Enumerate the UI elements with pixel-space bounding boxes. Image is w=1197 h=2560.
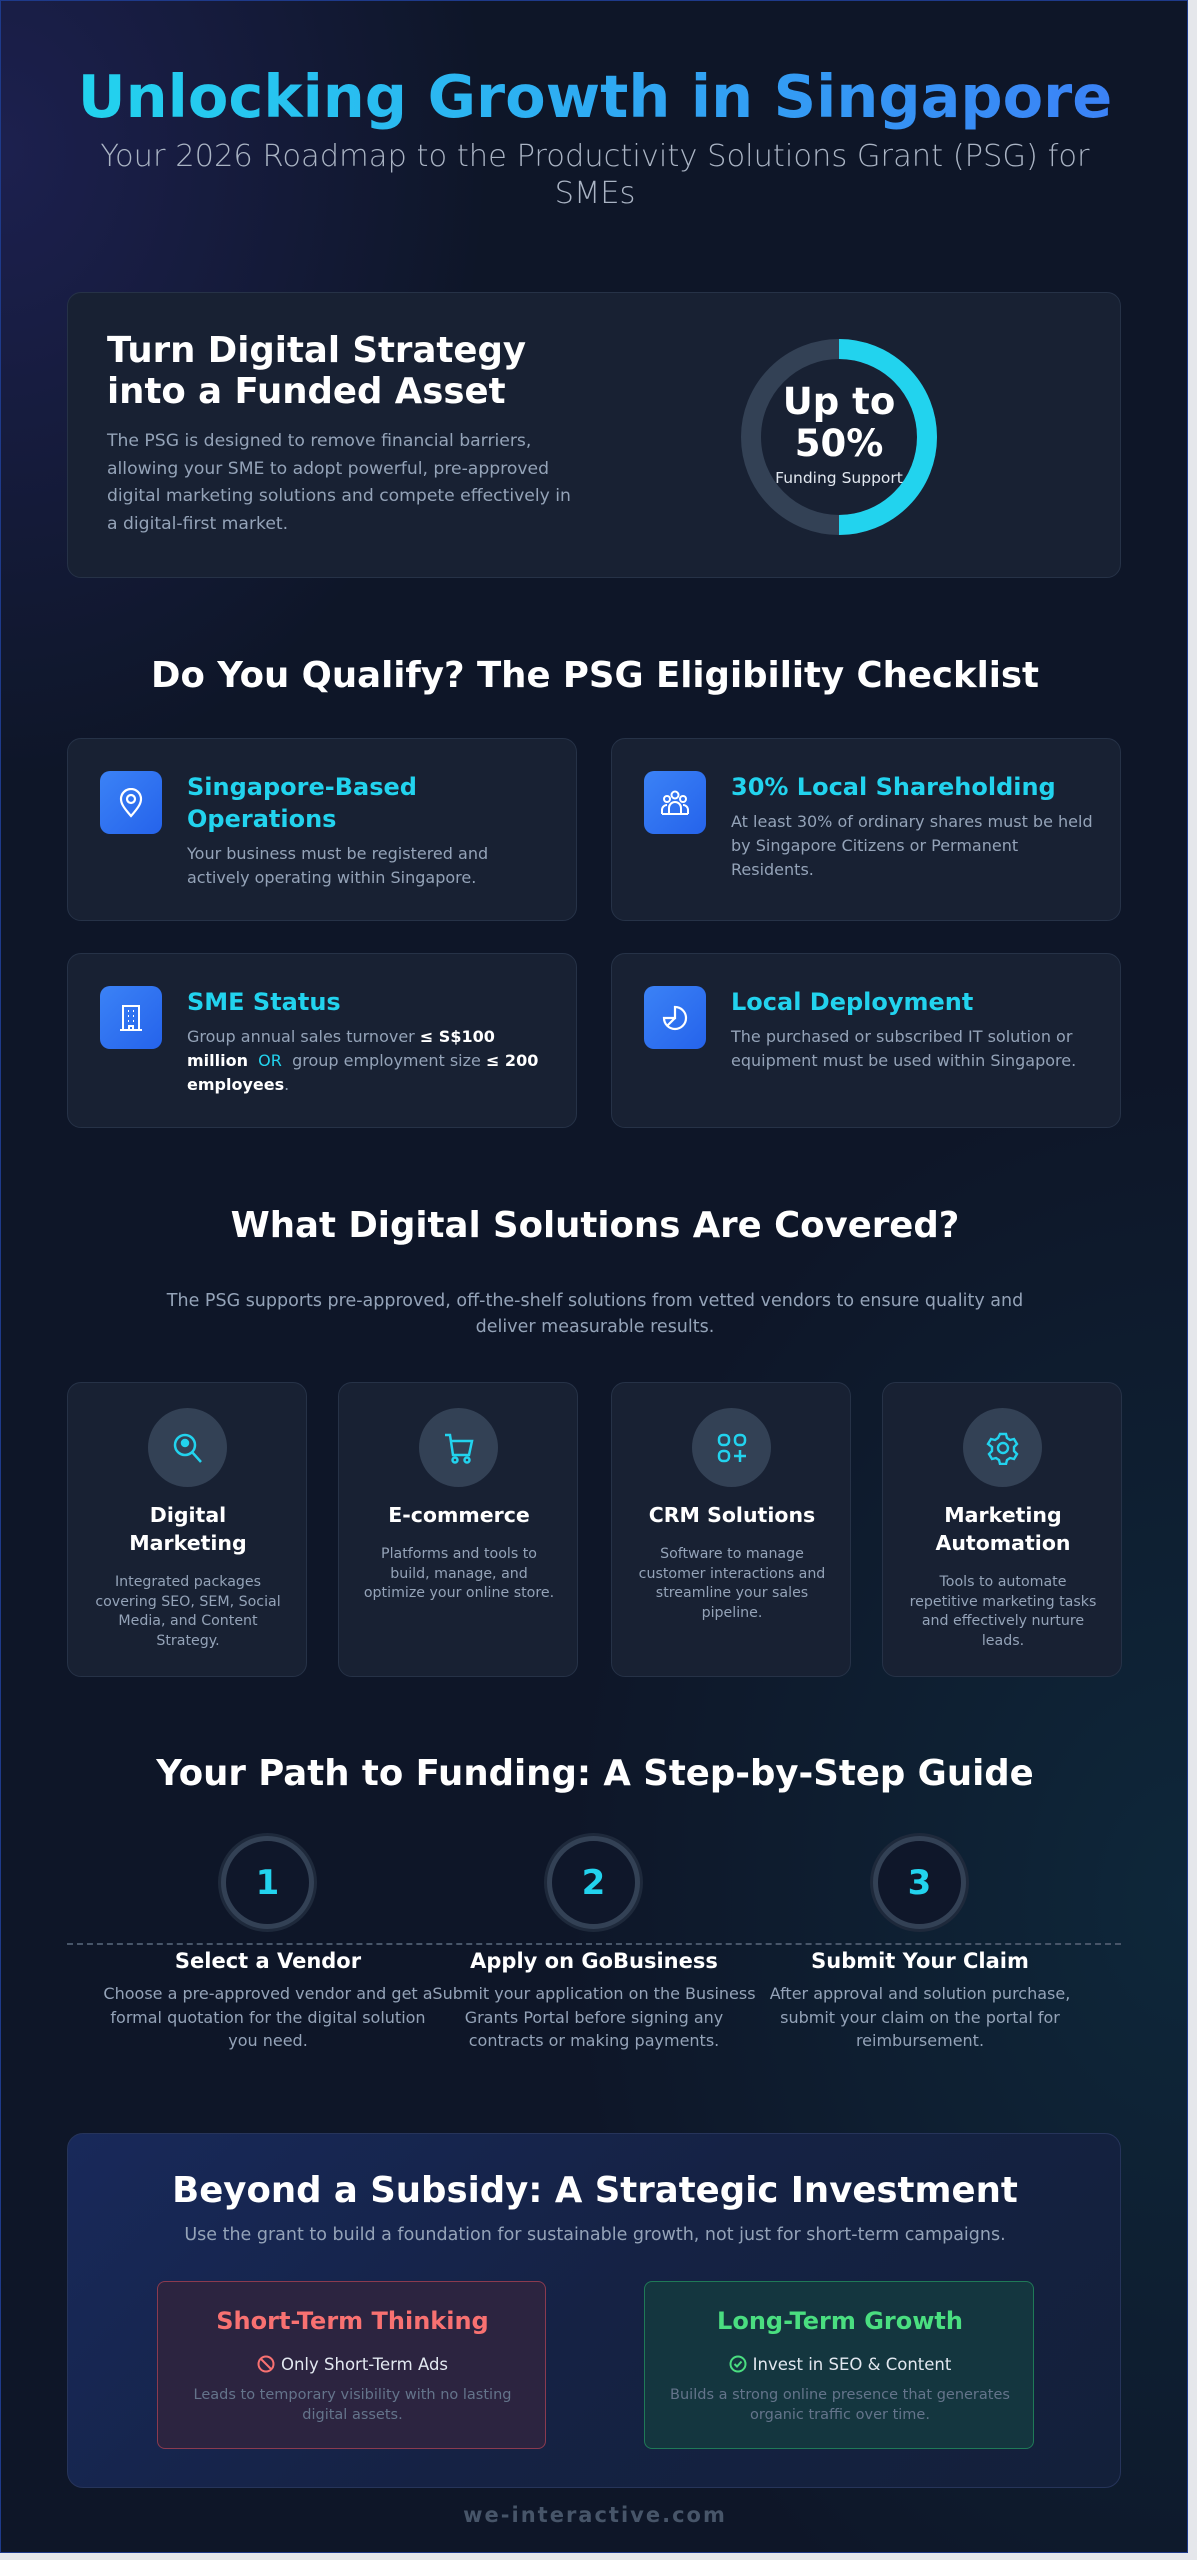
panel: e-commerce: Platforms and tools to xyxy=(381,1546,537,1562)
panel: shareholding: At least 30% of ordinary shares must be held xyxy=(731,812,1093,831)
investment heading: Beyond a Subsidy: A Strategic Investment xyxy=(172,2170,1018,2211)
icon: gear xyxy=(963,1408,1042,1487)
step 2 text: Submit your application on the Business Grants Portal before signing any contracts or making payments. xyxy=(432,1984,756,2050)
step 1 text: Choose a pre-approved vendor and get a formal quotation for the digital solution you need. xyxy=(103,1984,433,2050)
panel: digital marketing: Media, and Content xyxy=(118,1613,258,1629)
step 3 text: Submit Your Claim xyxy=(811,1949,1029,1973)
panel: marketing automation: Marketing Automation xyxy=(935,1503,1071,1555)
panel: marketing automation xyxy=(882,1382,1122,1677)
icon: pie xyxy=(644,986,706,1049)
step 1 text: Select a Vendor xyxy=(175,1949,361,1973)
panel: Singapore-based: Singapore-Based Operations xyxy=(187,773,417,833)
donut chart: Funding Support xyxy=(775,469,903,487)
panel: marketing automation: and effectively nurture xyxy=(922,1613,1084,1629)
panel: digital marketing: covering SEO, SEM, Social xyxy=(95,1594,281,1610)
box: short-term: Leads to temporary visibility with no lasting digital assets. xyxy=(194,2387,511,2423)
panel: digital marketing: Strategy. xyxy=(156,1633,220,1649)
icon: building xyxy=(100,986,162,1049)
panel: SME status: SME Status xyxy=(187,988,341,1016)
panel: Singapore-based: Your business must be registered and actively operating within Singapore. xyxy=(187,844,488,887)
panel: shareholding: 30% Local Shareholding xyxy=(731,773,1056,801)
step 3: 3 xyxy=(908,1862,931,1902)
box: short-term: Short-Term Thinking xyxy=(216,2307,489,2335)
step 3 text: After approval and solution purchase, submit your claim on the portal for reimbursement. xyxy=(770,1984,1070,2050)
box: long-term: Long-Term Growth xyxy=(717,2307,963,2335)
panel: marketing automation: Tools to automate xyxy=(940,1574,1066,1590)
panel: marketing automation: repetitive marketing tasks xyxy=(910,1594,1096,1610)
panel: local deployment xyxy=(611,953,1121,1128)
item: invest in SEO: Invest in SEO & Content xyxy=(753,2355,951,2374)
step 2 text: Apply on GoBusiness xyxy=(470,1949,718,1973)
dashed timeline line xyxy=(67,1943,1121,1945)
hero text: The PSG is designed to remove financial barriers, allowing your SME to adopt powerful, pre-approved digital marketing solutions and compete effectively in a digital-first market. xyxy=(107,431,571,534)
panel: local deployment: Local Deployment xyxy=(731,988,973,1016)
hero heading: Turn Digital Strategy into a Funded Asset xyxy=(107,330,526,412)
icon: location xyxy=(100,771,162,834)
box: short-term xyxy=(157,2281,546,2449)
panel: CRM: CRM Solutions xyxy=(649,1503,815,1527)
icon: apps xyxy=(692,1408,771,1487)
step 2: 2 xyxy=(582,1862,605,1902)
donut chart xyxy=(741,339,937,535)
step 3 text xyxy=(770,1949,1070,2050)
panel: strategic investment xyxy=(67,2133,1121,2488)
panel: hero xyxy=(67,292,1121,578)
solutions intro: The PSG supports pre-approved, off-the-shelf solutions from vetted vendors to ensure quality and deliver measurable results. xyxy=(167,1291,1023,1337)
panel: digital marketing: Digital Marketing xyxy=(129,1503,247,1555)
icon: search xyxy=(148,1408,227,1487)
panel: shareholding: Residents. xyxy=(731,860,814,879)
panel: marketing automation: leads. xyxy=(982,1633,1024,1649)
panel: SME status: Group annual sales turnover ≤ S$100 million OR group employment size ≤ 200 employees. xyxy=(187,1027,538,1094)
item: only short-term ads: Only Short-Term Ads xyxy=(281,2355,448,2374)
panel: CRM: Software to manage xyxy=(660,1546,804,1562)
icon: cart xyxy=(419,1408,498,1487)
heading: solutions: What Digital Solutions Are Covered? xyxy=(231,1205,959,1246)
panel: CRM: customer interactions and xyxy=(639,1566,825,1582)
panel: e-commerce xyxy=(338,1382,578,1677)
panel: CRM: streamline your sales xyxy=(656,1585,808,1601)
panel: digital marketing: Integrated packages xyxy=(115,1574,261,1590)
panel: shareholding xyxy=(611,738,1121,921)
step 1 text xyxy=(103,1949,433,2050)
panel: e-commerce: build, manage, and xyxy=(390,1566,528,1582)
panel: local deployment: The purchased or subscribed IT solution or equipment must be used within Singapore. xyxy=(731,1027,1076,1070)
subtitle: Your 2026 Roadmap to the Productivity Solutions Grant (PSG) for SMEs xyxy=(100,139,1090,211)
donut chart: 50% xyxy=(795,422,883,465)
investment subtitle: Use the grant to build a foundation for sustainable growth, not just for short-term campaigns. xyxy=(184,2225,1006,2245)
panel: e-commerce: optimize your online store. xyxy=(364,1585,554,1601)
panel: SME status xyxy=(67,953,577,1128)
panel: digital marketing xyxy=(67,1382,307,1677)
panel: shareholding: by Singapore Citizens or Permanent xyxy=(731,836,1018,855)
step 1: 1 xyxy=(256,1862,279,1902)
title: Unlocking Growth in Singapore xyxy=(78,62,1112,131)
heading: eligibility: Do You Qualify? The PSG Eligibility Checklist xyxy=(151,655,1039,696)
panel: Singapore-based xyxy=(67,738,577,921)
box: long-term: Builds a strong online presence that generates organic traffic over time. xyxy=(670,2387,1010,2423)
panel: e-commerce: E-commerce xyxy=(388,1503,530,1527)
footer: we-interactive.com xyxy=(463,2503,727,2527)
heading: steps: Your Path to Funding: A Step-by-Step Guide xyxy=(156,1753,1034,1794)
panel: CRM xyxy=(611,1382,851,1677)
step 2 text xyxy=(432,1949,756,2050)
donut chart: Up to xyxy=(783,380,895,423)
panel: CRM: pipeline. xyxy=(702,1605,762,1621)
box: long-term xyxy=(644,2281,1034,2449)
icon: people xyxy=(644,771,706,834)
